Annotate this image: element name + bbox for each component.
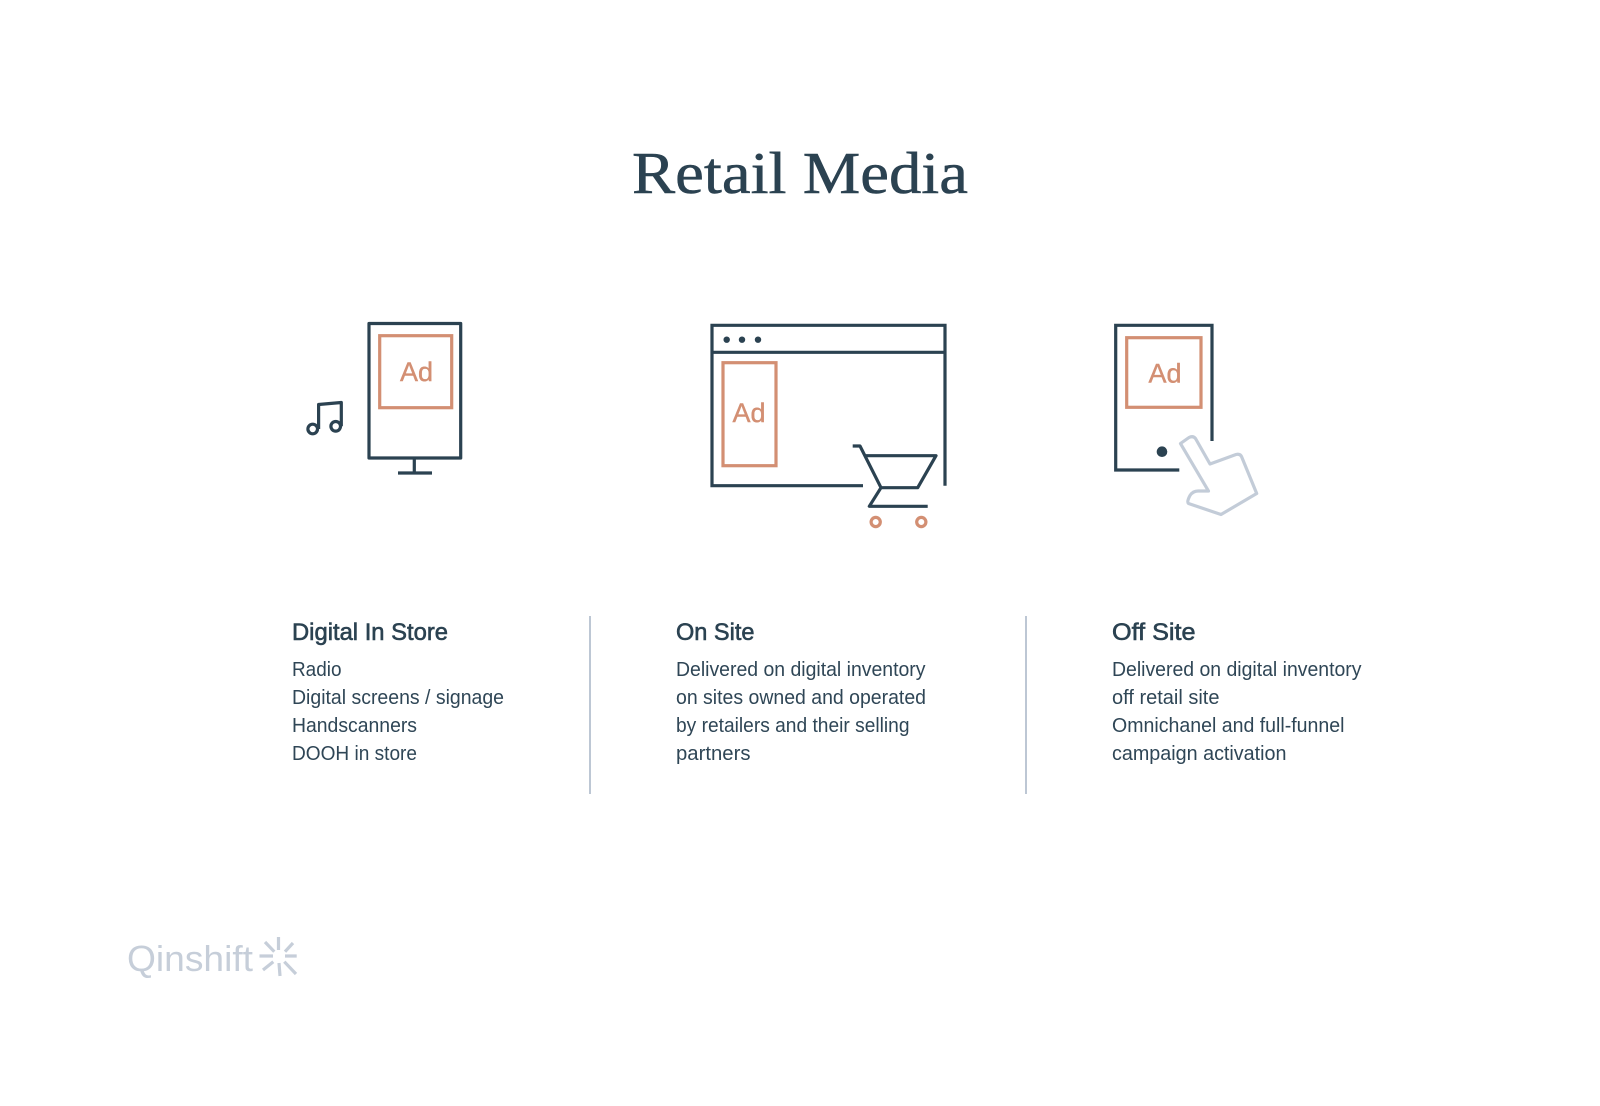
heading: On Site: [676, 619, 754, 646]
text block: [1112, 659, 1362, 765]
icon: shopping cart: [853, 446, 936, 527]
text block: DOOH in store: [292, 743, 417, 765]
ad placement: Ad: [400, 357, 433, 387]
text block: [676, 659, 926, 765]
text block: on sites owned and operated: [676, 687, 926, 709]
column: Off Site: [1112, 619, 1362, 765]
icon: monitor on stand: [369, 324, 461, 473]
text block: Omnichanel and full-funnel: [1112, 715, 1344, 737]
text block: Digital screens / signage: [292, 687, 504, 709]
text block: campaign activation: [1112, 743, 1286, 765]
text block: off retail site: [1112, 687, 1220, 709]
ad placement: [723, 363, 776, 466]
heading: Digital In Store: [292, 619, 448, 646]
logo wordmark: Qinshift: [127, 938, 253, 979]
icon: browser window: [712, 325, 945, 486]
text block: by retailers and their selling: [676, 715, 910, 737]
ad placement: Ad: [732, 398, 766, 428]
text block: Radio: [292, 659, 342, 681]
icon: logo starburst: [260, 937, 297, 976]
column: On Site: [676, 619, 926, 765]
icon: pointing hand: [1180, 437, 1257, 514]
text block: Delivered on digital inventory: [1112, 659, 1362, 681]
column: Digital In Store: [292, 619, 504, 765]
title: Retail Media: [632, 140, 968, 206]
logo: Qinshift: [127, 937, 297, 979]
ad placement: [1127, 338, 1201, 407]
text block: [292, 659, 504, 765]
text block: Handscanners: [292, 715, 417, 737]
icon: mobile device with pointing hand: [1116, 325, 1257, 514]
icon: website with ad and shopping cart: [712, 325, 945, 527]
icon: music note: [308, 402, 341, 434]
ad placement: Ad: [1148, 358, 1182, 388]
heading: Off Site: [1112, 619, 1196, 646]
text block: Delivered on digital inventory: [676, 659, 926, 681]
icon: phone outline: [1116, 325, 1212, 470]
ad placement: [380, 336, 452, 408]
icon: digital in-store screen with music note: [308, 324, 461, 473]
text block: partners: [676, 743, 750, 765]
